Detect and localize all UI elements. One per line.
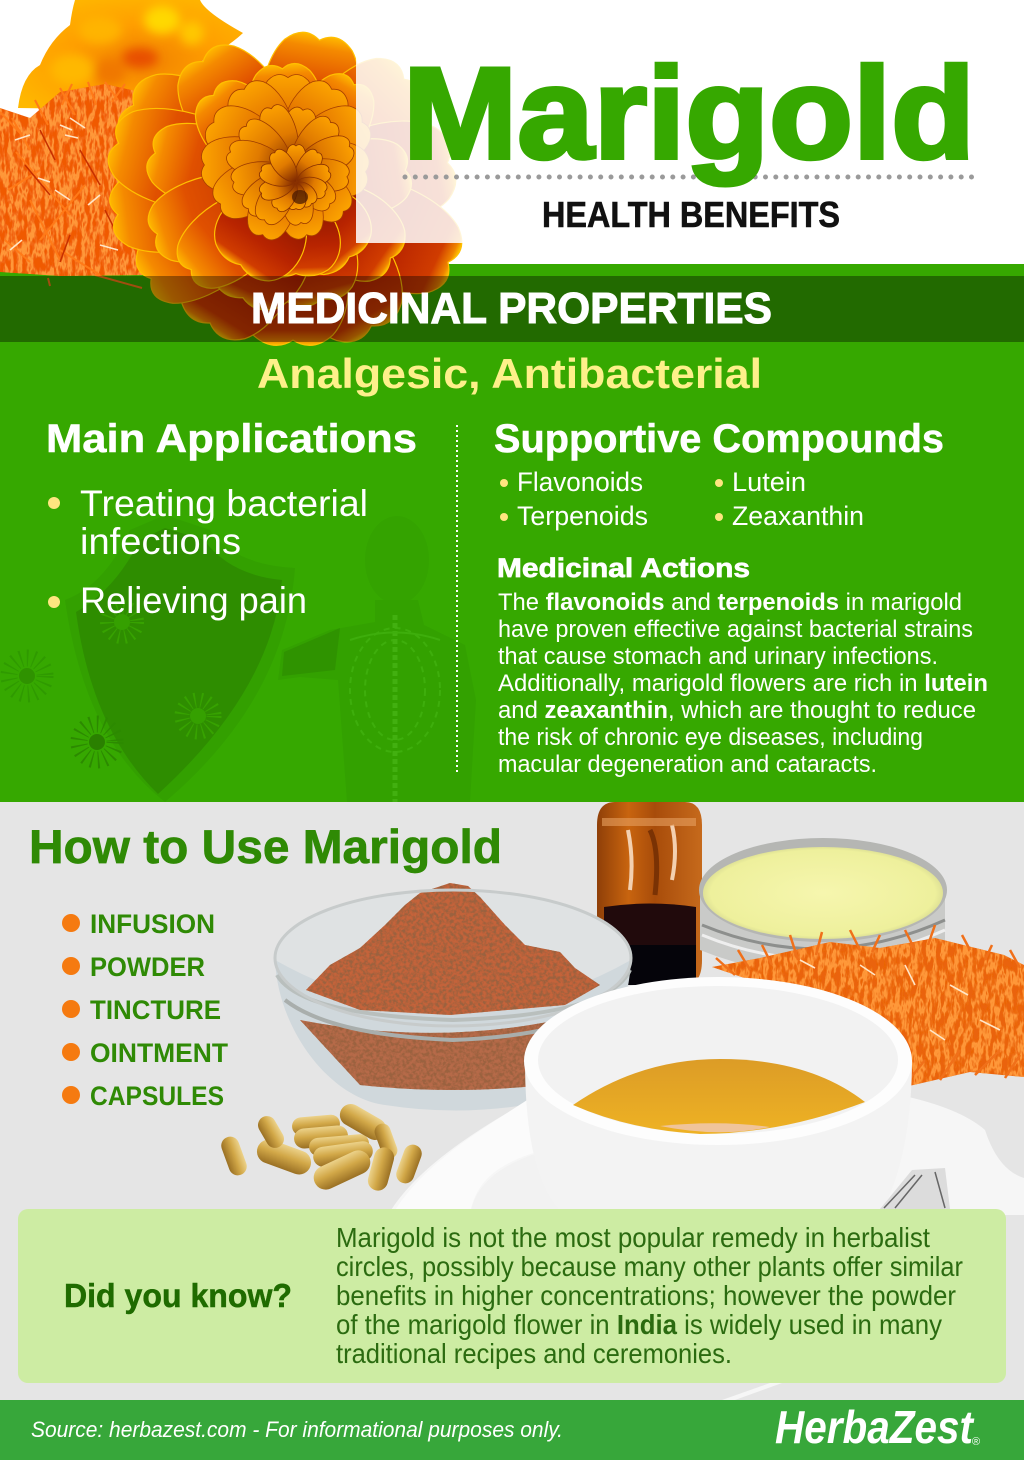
compounds list: Terpenoids <box>517 501 648 531</box>
medicinal actions text: Additionally, marigold flowers are rich in lutein <box>498 670 988 697</box>
dotted rule under title <box>405 174 978 180</box>
image: ointment tin <box>699 838 947 973</box>
list: forms of use <box>62 909 228 1111</box>
faded flower portion <box>356 58 462 243</box>
did you know text <box>336 1222 963 1369</box>
item: capsules: CAPSULES <box>90 1081 224 1111</box>
compounds list: Flavonoids <box>517 467 643 497</box>
image: dried petals right <box>712 925 1024 1086</box>
footer <box>0 1400 1024 1460</box>
panel: medicinal properties band <box>0 276 1024 342</box>
item: tincture: TINCTURE <box>90 995 221 1025</box>
panel: main applications <box>46 417 417 621</box>
panel: supportive compounds <box>494 417 988 778</box>
heading: medicinal actions: Medicinal Actions <box>497 553 750 583</box>
heading: how to use marigold: How to Use Marigold <box>29 820 502 873</box>
image: powder in glass bowl <box>275 883 631 1110</box>
logo: HerbaZest: ® <box>972 1436 980 1448</box>
image: dried petals left <box>0 82 150 288</box>
did you know text: Marigold is not the most popular remedy in herbalist <box>336 1222 930 1253</box>
subtitle: HEALTH BENEFITS <box>542 194 840 235</box>
medicinal actions text: that cause stomach and urinary infections. <box>498 643 938 670</box>
heading: supportive compounds: Supportive Compounds <box>494 417 944 461</box>
title: Marigold <box>403 40 975 186</box>
heading: medicinal properties: MEDICINAL PROPERTIES <box>251 284 772 333</box>
medicinal actions text <box>498 589 988 778</box>
medicinal actions text: have proven effective against bacterial strains <box>498 616 973 643</box>
medicinal actions text: macular degeneration and cataracts. <box>498 751 877 778</box>
image: back marigold flower <box>18 0 243 110</box>
medicinal actions text: The flavonoids and terpenoids in marigold <box>498 589 962 616</box>
image: capsules <box>219 1100 424 1194</box>
medicinal actions text: and zeaxanthin, which are thought to reduce <box>498 697 976 724</box>
background illustration: shield and viruses <box>9 515 295 802</box>
medicinal actions text: the risk of chronic eye diseases, including <box>498 724 923 751</box>
heading: did you know: Did you know? <box>64 1277 292 1314</box>
item: infusion: INFUSION <box>90 909 215 939</box>
image: tincture bottle <box>597 802 702 985</box>
bullet: relieving pain: Relieving pain <box>80 580 307 621</box>
compounds list: Lutein <box>732 467 806 497</box>
panel: did you know <box>18 1209 1006 1383</box>
did you know text: of the marigold flower in India is widely used in many <box>336 1309 942 1340</box>
panel: medicinal properties background <box>0 264 1024 802</box>
image: main marigold flower <box>100 27 475 357</box>
background illustration: human skeleton <box>278 516 476 802</box>
bullet: treating bacterial infections: Treating bacterial <box>80 483 368 524</box>
did you know text: circles, possibly because many other plants offer similar <box>336 1251 963 1282</box>
compounds list: Zeaxanthin <box>732 501 864 531</box>
did you know text: benefits in higher concentrations; however the powder <box>336 1280 956 1311</box>
divider <box>456 425 458 772</box>
properties list: Analgesic, Antibacterial <box>257 350 762 397</box>
image: spoon handle <box>722 1383 782 1400</box>
image: cup of tea on saucer <box>388 977 1024 1215</box>
item: powder: POWDER <box>90 952 205 982</box>
compounds list <box>500 467 864 531</box>
heading: main applications: Main Applications <box>46 417 417 461</box>
did you know text: traditional recipes and ceremonies. <box>336 1338 732 1369</box>
item: ointment: OINTMENT <box>90 1038 228 1068</box>
source line: Source: herbazest.com - For informational purposes only. <box>31 1417 563 1442</box>
bullet: treating bacterial infections <box>48 483 368 562</box>
panel: how to use background <box>0 802 1024 1400</box>
bullet: treating bacterial infections: infections <box>80 521 241 562</box>
logo: HerbaZest: HerbaZest <box>775 1401 974 1453</box>
